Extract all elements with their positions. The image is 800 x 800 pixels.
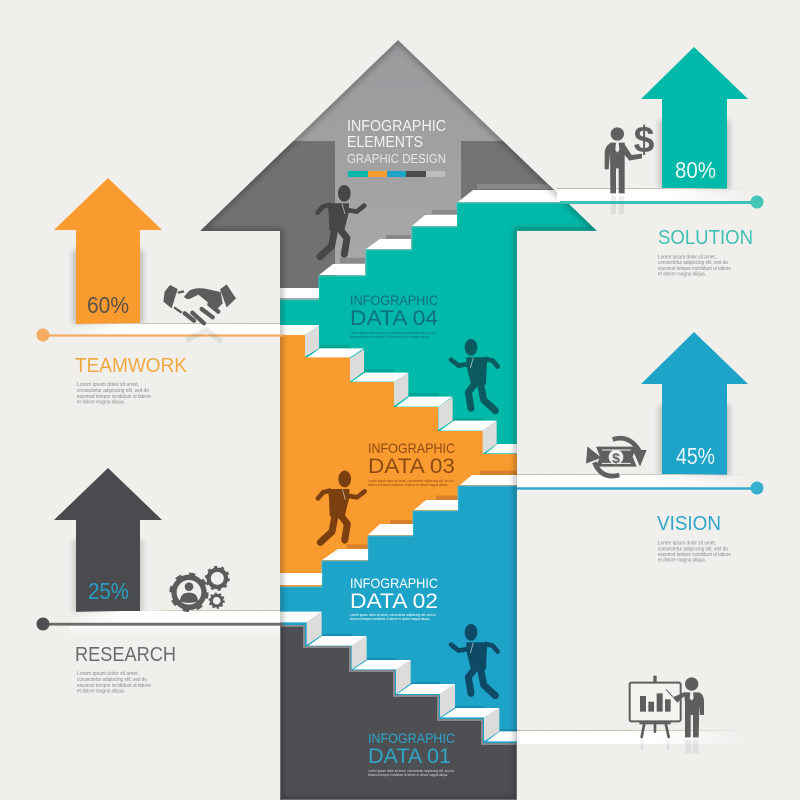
body text: vision: et dolore magna aliqua. (658, 558, 706, 564)
body text: vision: Lorem ipsum dolor sit amet, (658, 540, 716, 546)
shelf top shadow (517, 474, 747, 476)
label: data 03: Lorem ipsum dolor sit amet, consectetur adipiscing elit, sed do (368, 478, 455, 483)
body text: vision: eiusmod tempor incididunt ut labore (658, 552, 731, 558)
label: data 03: eiusmod tempor incididunt ut labore et dolore magna aliqua. (368, 482, 448, 487)
heading: vision: VISION (657, 513, 721, 535)
percent: 80: 80% (675, 157, 716, 183)
white shelf (517, 475, 747, 487)
back-of-step shadows on grey (340, 184, 555, 263)
body text: research: et dolore magna aliqua. (77, 688, 125, 694)
shelf top shadow (73, 323, 280, 324)
label: data 04: eiusmod tempor incididunt ut labore et dolore magna aliqua. (350, 334, 430, 339)
white shelf (557, 189, 747, 202)
icon: money exchange (586, 438, 647, 476)
label: data 01: INFOGRAPHIC (368, 730, 455, 746)
icon: presenter with easel chart (630, 676, 704, 753)
label: data 04: DATA 04 (350, 307, 438, 330)
label: data 02: Lorem ipsum dolor sit amet, consectetur adipiscing elit, sed do (350, 612, 437, 617)
body text: solution: eiusmod tempor incididunt ut labore (658, 266, 731, 272)
heading: teamwork: TEAMWORK (75, 355, 188, 377)
label: data 04: INFOGRAPHIC (350, 292, 438, 308)
percent: 45: 45% (676, 443, 715, 469)
icon: dollar in bill: $ (612, 450, 620, 466)
label: data 01: DATA 01 (368, 745, 451, 768)
connector line (43, 334, 283, 337)
top stair treads (280, 190, 569, 298)
label: data 04: Lorem ipsum dolor sit amet, consectetur adipiscing elit, sed do (350, 330, 437, 335)
white shelf (517, 731, 742, 744)
central arrow with staircase (200, 40, 597, 800)
connector dot (750, 196, 764, 208)
white shelf (70, 611, 280, 623)
heading: research: RESEARCH (75, 644, 176, 666)
label: data 02: DATA 02 (350, 590, 438, 613)
panel: teal stair block (280, 203, 597, 480)
panel: dark grey stair block (280, 626, 517, 800)
body text: vision: consectetur adipiscing elit, sed do (658, 546, 728, 552)
body text: teamwork (77, 382, 151, 406)
body text: teamwork: eiusmod tempor incididunt ut labore (77, 394, 151, 400)
panel: blue stair block (280, 486, 517, 760)
arrow: dark 25 percent (54, 468, 162, 612)
label: data 02 (350, 575, 438, 621)
shelf top shadow (140, 610, 280, 612)
body text: solution: et dolore magna aliqua. (658, 272, 706, 278)
panel: orange stair block (280, 335, 517, 600)
heading: infographic elements: ELEMENTS (347, 134, 423, 151)
heading: solution: SOLUTION (658, 227, 753, 249)
label: data 01: Lorem ipsum dolor sit amet, consectetur adipiscing elit, sed do (368, 768, 455, 773)
connector line (560, 201, 757, 204)
percent: 60: 60% (87, 292, 129, 318)
body text: teamwork: consectetur adipiscing elit, sed do (77, 388, 149, 394)
connector dot (36, 618, 50, 630)
label: data 03: DATA 03 (368, 455, 455, 478)
colour legend strip (348, 171, 445, 177)
icon: businessman with dollar (605, 127, 642, 214)
inner edge shadow (200, 40, 597, 800)
icon: gears (172, 567, 228, 610)
figure: teal runner (451, 339, 498, 411)
blue stair treads (280, 475, 517, 585)
panel: presentation shelf (517, 676, 742, 753)
dark left wing (200, 141, 335, 295)
heading: infographic elements (347, 118, 446, 166)
heading: infographic elements: GRAPHIC DESIGN (347, 151, 446, 166)
blue stair shadows (322, 634, 517, 732)
figure: orange runner (318, 471, 365, 542)
orange shadows behind blue treads (346, 470, 517, 548)
label: data 04 (350, 292, 438, 339)
icon: handshake (163, 284, 236, 342)
panel: vision (517, 332, 764, 564)
body text: solution: Lorem ipsum dolor sit amet, (658, 254, 716, 260)
figure: blue runner (451, 624, 498, 696)
label: data 03 (368, 440, 455, 487)
label: data 01 (368, 730, 455, 777)
shelf top shadow (517, 730, 742, 732)
body text: research (77, 671, 151, 694)
heading: infographic elements: INFOGRAPHIC (347, 118, 446, 135)
teal stair shadows (320, 345, 483, 421)
arrow head background (200, 40, 585, 300)
connector dot (750, 482, 764, 494)
label: data 03: INFOGRAPHIC (368, 440, 455, 456)
label: data 01: eiusmod tempor incididunt ut labore et dolore magna aliqua. (368, 772, 448, 777)
body text: teamwork: Lorem ipsum dolor sit amet, (77, 382, 139, 388)
shelf reflection (70, 626, 280, 638)
label: data 02: INFOGRAPHIC (350, 575, 438, 591)
panel: solution (557, 47, 764, 278)
body text: research: eiusmod tempor incididunt ut labore (77, 683, 151, 689)
connector dot (36, 328, 50, 342)
white shelf (70, 324, 280, 335)
arrow: blue 45 percent (641, 332, 748, 475)
percent: 25: 25% (88, 578, 129, 604)
grey stair treads with side faces (280, 612, 517, 741)
arrow: orange 60 percent (54, 178, 162, 324)
body text: solution: consectetur adipiscing elit, sed do (658, 260, 728, 266)
connector line (517, 487, 757, 490)
shelf top shadow (557, 188, 747, 190)
body text: research: Lorem ipsum dolor sit amet, (77, 671, 139, 677)
dark right wing (461, 141, 556, 200)
label: data 02: eiusmod tempor incididunt ut labore et dolore magna aliqua. (350, 616, 430, 621)
body text: teamwork: et dolore magna aliqua. (77, 400, 125, 406)
body text: solution (658, 254, 731, 278)
connector line (43, 623, 283, 626)
panel: research (36, 468, 283, 694)
body text: vision (658, 540, 731, 564)
arrow: teal 80 percent (641, 47, 748, 189)
figure: grey runner (318, 185, 364, 257)
body text: research: consectetur adipiscing elit, sed do (77, 677, 147, 683)
orange stair treads with side faces (280, 325, 517, 548)
panel: teamwork (36, 178, 283, 406)
icon: dollar sign: $ (634, 119, 655, 160)
